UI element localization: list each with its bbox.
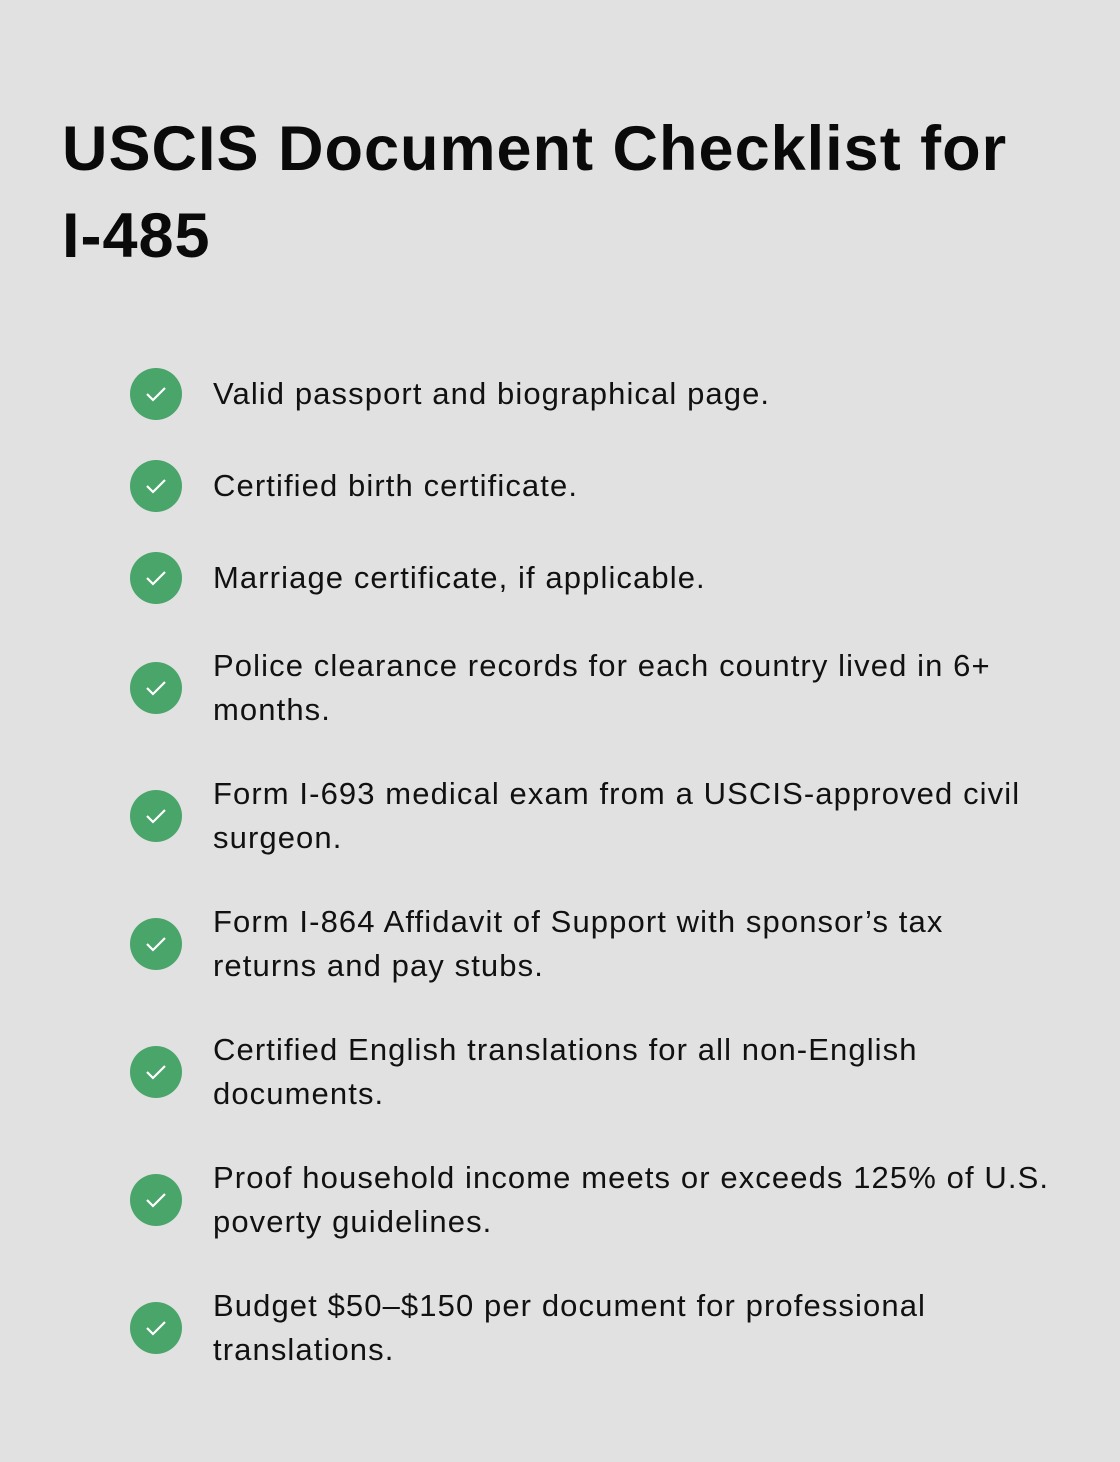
- item: budget: [130, 1288, 926, 1367]
- item: medical exam: surgeon.: [213, 820, 342, 855]
- item: marriage certificate: [130, 552, 706, 604]
- item: budget: translations.: [213, 1332, 394, 1367]
- item: translations: [130, 1032, 918, 1111]
- title: [62, 114, 1007, 271]
- item: income: poverty guidelines.: [213, 1204, 492, 1239]
- item: translations: Certified English translations for all non-English: [213, 1032, 918, 1067]
- title: USCIS Document Checklist for: [62, 114, 1007, 184]
- item: income: [130, 1160, 1049, 1239]
- item: birth certificate: Certified birth certificate.: [213, 468, 578, 503]
- item: affidavit: [130, 904, 943, 983]
- item: police clearance: months.: [213, 692, 331, 727]
- item: translations: documents.: [213, 1076, 384, 1111]
- title: I-485: [62, 201, 211, 271]
- item: affidavit: Form I-864 Affidavit of Support with sponsor’s tax: [213, 904, 943, 939]
- item: medical exam: Form I-693 medical exam from a USCIS-approved civil: [213, 776, 1020, 811]
- item: medical exam: [130, 776, 1020, 855]
- item: passport: Valid passport and biographical page.: [213, 376, 770, 411]
- item: income: Proof household income meets or exceeds 125% of U.S.: [213, 1160, 1049, 1195]
- item: birth certificate: [130, 460, 578, 512]
- item: budget: Budget $50–$150 per document for professional: [213, 1288, 926, 1323]
- item: police clearance: [130, 648, 991, 727]
- item: marriage certificate: Marriage certificate, if applicable.: [213, 560, 706, 595]
- item: affidavit: returns and pay stubs.: [213, 948, 544, 983]
- item: police clearance: Police clearance records for each country lived in 6+: [213, 648, 991, 683]
- item: passport: [130, 368, 770, 420]
